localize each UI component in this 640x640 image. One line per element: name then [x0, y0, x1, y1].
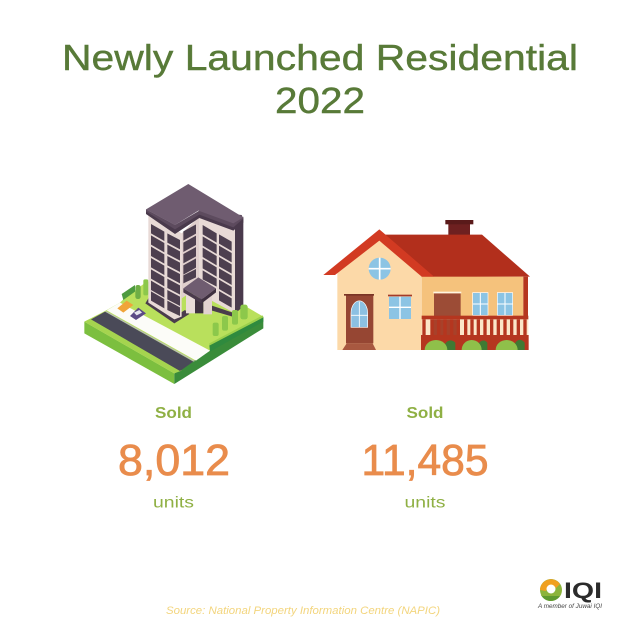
- stat: houses sold: [362, 405, 488, 512]
- side window: [389, 297, 411, 319]
- porch windows: [473, 293, 488, 315]
- logo: IQI: IQI: [564, 578, 602, 603]
- title: 2022: [275, 80, 365, 121]
- stat: houses sold: 11,485: [362, 436, 488, 485]
- roof: [146, 209, 243, 234]
- logo: IQI: [537, 578, 602, 610]
- logo: IQI: A member of Juwai IQI: [537, 603, 602, 610]
- building walls: [148, 212, 182, 319]
- source note: Source: National Property Information Centre (NAPIC): [166, 605, 440, 617]
- stat: apartments sold: units: [153, 494, 194, 512]
- windows: [151, 224, 232, 316]
- cars: [117, 301, 133, 313]
- icon: house: [323, 220, 530, 350]
- railing: [422, 319, 528, 335]
- stat: apartments sold: Sold: [155, 405, 192, 422]
- title: Newly Launched Residential: [62, 37, 578, 78]
- building base: [145, 298, 189, 323]
- stat: houses sold: units: [404, 494, 446, 512]
- trees: [213, 305, 248, 336]
- round window: [369, 258, 391, 280]
- icon: apartment building on green lot: [84, 184, 263, 384]
- entrance: [186, 294, 195, 313]
- door: [346, 295, 373, 343]
- stat: apartments sold: [118, 405, 230, 512]
- title: [62, 37, 578, 121]
- bushes: [443, 340, 525, 350]
- stat: apartments sold: 8,012: [118, 436, 230, 485]
- stat: houses sold: Sold: [406, 405, 444, 422]
- porch door: [434, 293, 461, 317]
